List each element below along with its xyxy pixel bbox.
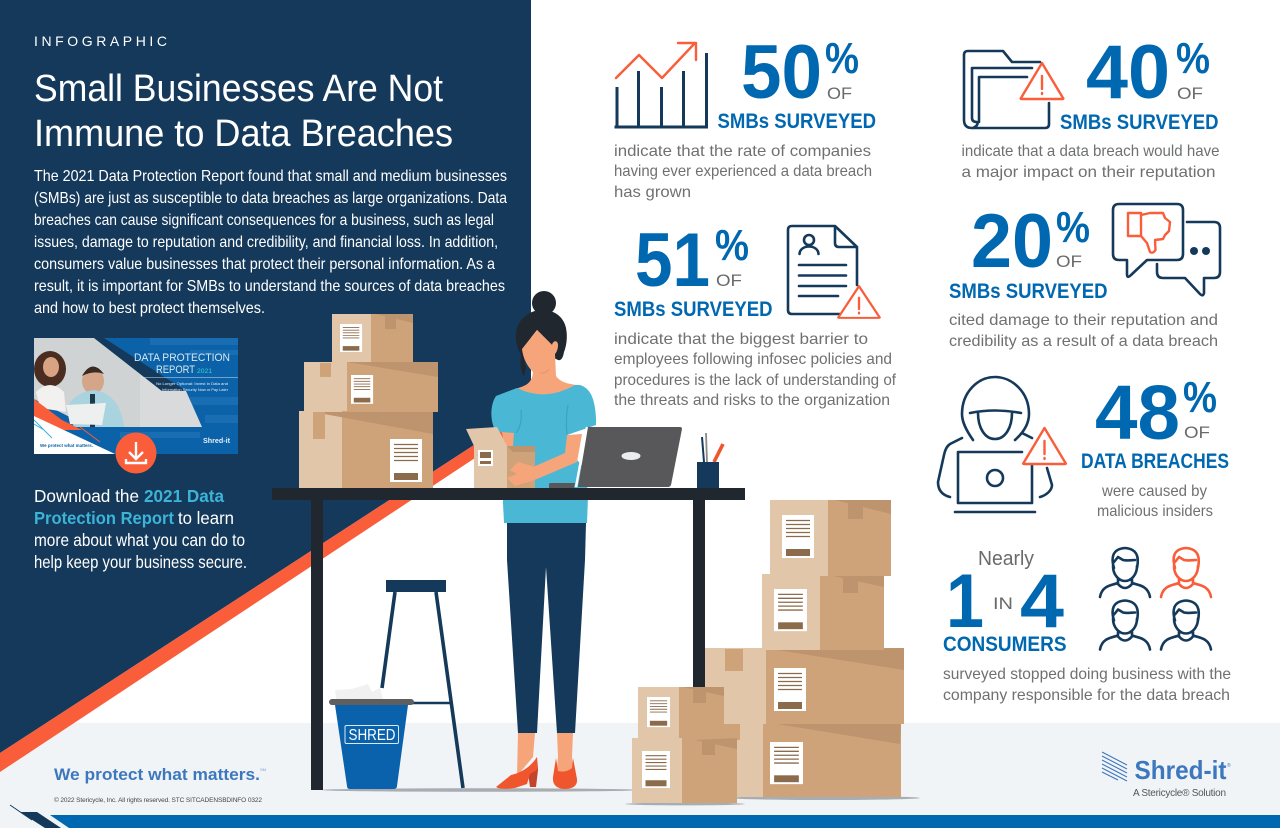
boxes: stack on desk (299, 314, 438, 488)
title: Immune to Data Breaches (34, 113, 453, 155)
stat: nearly 1 in 4 consumers: 1 (946, 559, 984, 644)
intro paragraph: and how to best protect themselves. (34, 300, 265, 317)
boxes: front stack (632, 687, 740, 803)
intro paragraph: issues, damage to reputation and credibility, and financial loss. In addition, (34, 234, 498, 251)
download call to action (34, 486, 247, 572)
intro paragraph: consumers value businesses that protect their personal information. As a (34, 256, 495, 273)
report cover thumbnail: No Longer Optional: Invest in Data and (156, 382, 228, 386)
stat: 48% malicious insiders (938, 370, 1229, 520)
stat: nearly 1 in 4 consumers (943, 548, 1231, 704)
stat: 20% reputation damage: OF (1056, 252, 1082, 271)
icon: hooded hacker at laptop (938, 377, 1066, 512)
title: Small Businesses Are Not (34, 68, 443, 110)
stat: 40% reputation impact: OF (1177, 84, 1203, 103)
boxes: right stack (705, 500, 904, 797)
stat: 40% reputation impact (962, 30, 1220, 181)
man in photo (66, 366, 124, 427)
stat: 51% infosec barrier: OF (716, 271, 742, 290)
panel: navy intro background (0, 0, 531, 753)
Shred-it logo (1102, 752, 1231, 799)
pants (507, 523, 586, 733)
neck and face (515, 330, 577, 399)
download call to action: to learn (178, 508, 234, 528)
intro paragraph: (SMBs) are just as susceptible to data breaches as large organizations. Data (34, 190, 507, 207)
stat: 40% reputation impact: indicate that a data breach would have (962, 143, 1220, 160)
Shred-it logo: A Stericycle® Solution (1133, 788, 1226, 799)
stat: 51% infosec barrier: SMBs SURVEYED (614, 298, 772, 321)
stat: nearly 1 in 4 consumers: IN (993, 594, 1013, 613)
report cover thumbnail: 2021 (197, 369, 213, 375)
tagline: We protect what matters. (54, 765, 260, 784)
stat: 50% companies breached: having ever experienced a data breach (614, 163, 872, 180)
stat: 51% infosec barrier: indicate that the biggest barrier to (614, 331, 868, 348)
intro paragraph: breaches can cause significant consequences for a business, such as legal (34, 212, 494, 229)
stat: 20% reputation damage: credibility as a result of a data breach (949, 333, 1218, 350)
intro paragraph: result, it is important for SMBs to understand the sources of data breaches (34, 278, 505, 295)
report cover thumbnail: We protect what matters. (40, 443, 93, 449)
hair (516, 291, 567, 376)
stat: 40% reputation impact: a major impact on their reputation (962, 164, 1216, 181)
Shred-it logo: ® (1227, 762, 1231, 769)
report cover thumbnail: REPORT (156, 364, 195, 376)
stat: 48% malicious insiders: DATA BREACHES (1081, 450, 1229, 473)
stat: 48% malicious insiders: were caused by (1101, 483, 1207, 500)
woman in photo (34, 351, 66, 412)
stat: 51% infosec barrier: the threats and risks to the organization (614, 392, 890, 409)
stat: 40% reputation impact: SMBs SURVEYED (1060, 111, 1218, 134)
shred bin: SHRED (348, 727, 396, 744)
stat: 51% infosec barrier (614, 218, 897, 409)
floor shadows (322, 788, 920, 805)
icon: four people, one highlighted (1100, 548, 1211, 650)
stat: 48% malicious insiders: OF (1184, 423, 1210, 442)
intro paragraph (34, 168, 507, 317)
Shred-it logo: Shred-it (1134, 755, 1227, 785)
stat: nearly 1 in 4 consumers: company responsible for the data breach (943, 687, 1230, 704)
stat: 50% companies breached: OF (827, 84, 852, 103)
stat: nearly 1 in 4 consumers: CONSUMERS (943, 633, 1066, 656)
shoes (496, 757, 577, 789)
stat: 51% infosec barrier: 51 (635, 218, 710, 303)
desk (272, 488, 745, 790)
stat: 51% infosec barrier: % (715, 221, 749, 270)
arms (502, 432, 582, 486)
stat: nearly 1 in 4 consumers: surveyed stopped doing business with the (943, 666, 1231, 683)
laptop (549, 427, 682, 488)
title (34, 68, 453, 155)
legs skin (517, 733, 574, 778)
orange diagonal stripe (0, 408, 531, 772)
eyebrow label: INFOGRAPHIC (34, 33, 167, 49)
icon: folder with warning (964, 51, 1063, 128)
stat: 50% companies breached: 50 (741, 30, 822, 115)
stat: nearly 1 in 4 consumers: 4 (1020, 559, 1064, 644)
shirt (491, 385, 596, 523)
person (491, 291, 596, 789)
download call to action: 2021 Data (144, 486, 224, 506)
stat: 48% malicious insiders: malicious insiders (1097, 503, 1213, 520)
stat: 48% malicious insiders: % (1183, 373, 1217, 422)
stat: 20% reputation damage: cited damage to their reputation and (949, 312, 1218, 329)
stat: 50% companies breached (614, 30, 876, 201)
stat: 20% reputation damage: % (1056, 203, 1090, 252)
stat: 50% companies breached: has grown (614, 184, 691, 201)
stat: 40% reputation impact: % (1176, 34, 1210, 83)
download call to action: Protection Report (34, 508, 174, 528)
small box held by person (466, 427, 535, 488)
stat: 51% infosec barrier: procedures is the lack of understanding of (614, 372, 897, 389)
download call to action: Download the (34, 486, 139, 506)
stat: 48% malicious insiders: 48 (1095, 370, 1180, 456)
icon: download button (116, 432, 156, 474)
download call to action: help keep your business secure. (34, 552, 247, 572)
report cover thumbnail (34, 338, 238, 474)
download call to action: more about what you can do to (34, 530, 245, 550)
stat: 50% companies breached: SMBs SURVEYED (718, 110, 876, 133)
stat: 50% companies breached: indicate that the rate of companies (614, 143, 871, 160)
intro paragraph: The 2021 Data Protection Report found that small and medium businesses (34, 168, 507, 185)
footer band (0, 723, 1280, 828)
stat: 20% reputation damage (949, 199, 1220, 350)
tagline: SM (260, 767, 266, 772)
stat: nearly 1 in 4 consumers: Nearly (978, 548, 1034, 570)
stat: 50% companies breached: % (825, 34, 859, 83)
icon: document with warning (788, 226, 880, 318)
report cover thumbnail: Information Security Now or Pay Later (162, 388, 229, 392)
icon: rising bar chart (614, 43, 708, 127)
icon: speech bubbles with thumbs down (1113, 204, 1220, 295)
stat: 40% reputation impact: 40 (1086, 30, 1170, 115)
stat: 20% reputation damage: 20 (971, 199, 1053, 284)
report cover thumbnail: Shred-it (203, 436, 230, 445)
shred bin (329, 684, 414, 789)
stat: 51% infosec barrier: employees following infosec policies and (614, 351, 892, 368)
stat: 20% reputation damage: SMBs SURVEYED (949, 280, 1108, 303)
report cover thumbnail: DATA PROTECTION (134, 352, 230, 364)
copyright line: © 2022 Stericycle, Inc. All rights reserved. STC SITCADENSBDINFO 0322 (54, 796, 262, 804)
stool (382, 580, 463, 788)
pencil cup (697, 433, 723, 488)
